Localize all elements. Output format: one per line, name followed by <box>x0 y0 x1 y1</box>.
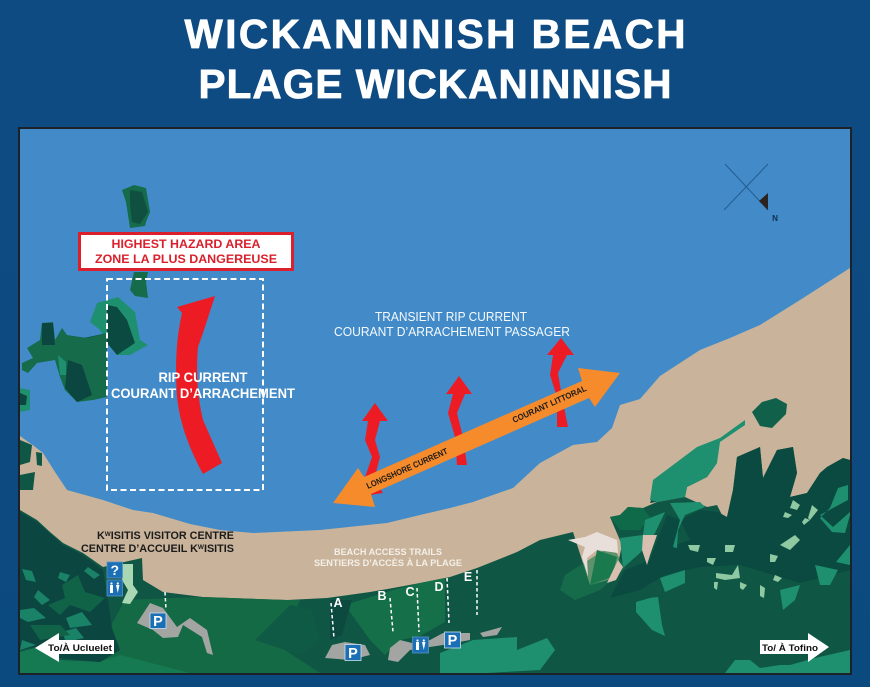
grey parking: visitor centre <box>137 603 213 655</box>
beach access trails label: SENTIERS D’ACCÈS À LA PLAGE <box>314 558 462 568</box>
map panel <box>20 129 850 673</box>
transient rip current label <box>334 312 570 336</box>
forest blotches west <box>20 567 100 650</box>
icon: information <box>107 562 122 578</box>
trail letters: C <box>405 585 415 599</box>
icon: parking visitor centre: P <box>153 614 163 630</box>
headland trees on west shore <box>20 440 42 490</box>
transient rip arrows <box>362 338 574 495</box>
arrow: to Tofino <box>760 633 829 662</box>
transient rip current label: COURANT D’ARRACHEMENT PASSAGER <box>334 324 570 339</box>
hazard area dashed box <box>107 279 263 490</box>
trail letters: A <box>333 596 343 610</box>
visitor centre label: CENTRE D’ACCUEIL K <box>81 543 200 555</box>
compass: N <box>772 214 778 223</box>
hazard callout: ZONE LA PLUS DANGEREUSE <box>95 252 277 266</box>
beach access trails label: BEACH ACCESS TRAILS <box>334 547 442 557</box>
visitor centre label: W <box>105 531 112 538</box>
rip current label: COURANT D’ARRACHEMENT <box>111 386 296 401</box>
island: central <box>84 297 148 355</box>
visitor centre label: K <box>97 530 105 542</box>
icon: information: ? <box>111 562 119 578</box>
sea <box>20 129 850 533</box>
trail letters <box>334 572 472 607</box>
title: PLAGE WICKANINNISH <box>198 61 672 107</box>
icon: washrooms trails <box>412 637 428 653</box>
teal patches <box>650 420 745 502</box>
island: west cluster <box>22 322 107 402</box>
rip current arrow <box>176 296 222 474</box>
arrow: to Tofino: To/ À Tofino <box>762 643 818 654</box>
visitor centre label <box>81 532 234 552</box>
beach sand <box>20 268 850 600</box>
littoral label: COURANT LITTORAL <box>511 383 588 425</box>
trail letters: E <box>464 570 472 584</box>
trail letters: D <box>434 580 444 594</box>
pale rock patches <box>568 532 618 577</box>
hazard callout <box>80 234 292 270</box>
pale green patches <box>688 500 818 598</box>
transient rip current label: TRANSIENT RIP CURRENT <box>375 309 527 324</box>
dark forest east <box>610 447 850 598</box>
compass <box>724 164 778 223</box>
map frame <box>19 128 851 674</box>
forest <box>20 420 850 673</box>
icon: washrooms visitor centre <box>107 580 122 596</box>
visitor centre label: W <box>198 544 205 551</box>
trail letters: B <box>377 589 387 603</box>
lighter green forest, centre <box>100 597 320 673</box>
arrow: to Ucluelet: To/À Ucluelet <box>48 643 113 654</box>
sand island tree clump <box>752 398 787 428</box>
icon: parking visitor centre <box>150 613 166 630</box>
arrow: to Ucluelet <box>35 633 114 662</box>
longshore label: LONGSHORE CURRENT <box>365 446 450 491</box>
icon: parking D <box>444 632 460 649</box>
islands <box>20 185 150 412</box>
island: islet under callout <box>130 272 148 298</box>
grey parking: washrooms <box>388 633 470 662</box>
visitor centre pale patch <box>122 564 138 604</box>
rip current label: RIP CURRENT <box>158 370 248 385</box>
visitor centre label: ISITIS VISITOR CENTRE <box>111 530 234 542</box>
beach access trails label <box>314 548 462 566</box>
title: WICKANINNISH BEACH <box>184 11 686 57</box>
icon: parking A <box>345 644 361 662</box>
hazard callout: HIGHEST HAZARD AREA <box>112 237 261 251</box>
longshore current arrow <box>333 368 620 507</box>
icon: parking A: P <box>348 646 358 662</box>
island: north <box>122 185 150 228</box>
icon: parking D: P <box>448 633 458 649</box>
title <box>184 11 686 107</box>
rip current label <box>112 372 295 398</box>
visitor centre label: ISITIS <box>204 543 234 555</box>
dark forest west <box>20 512 120 662</box>
trails <box>165 570 477 638</box>
grey parking: A <box>325 642 370 660</box>
island: small west <box>20 388 30 412</box>
